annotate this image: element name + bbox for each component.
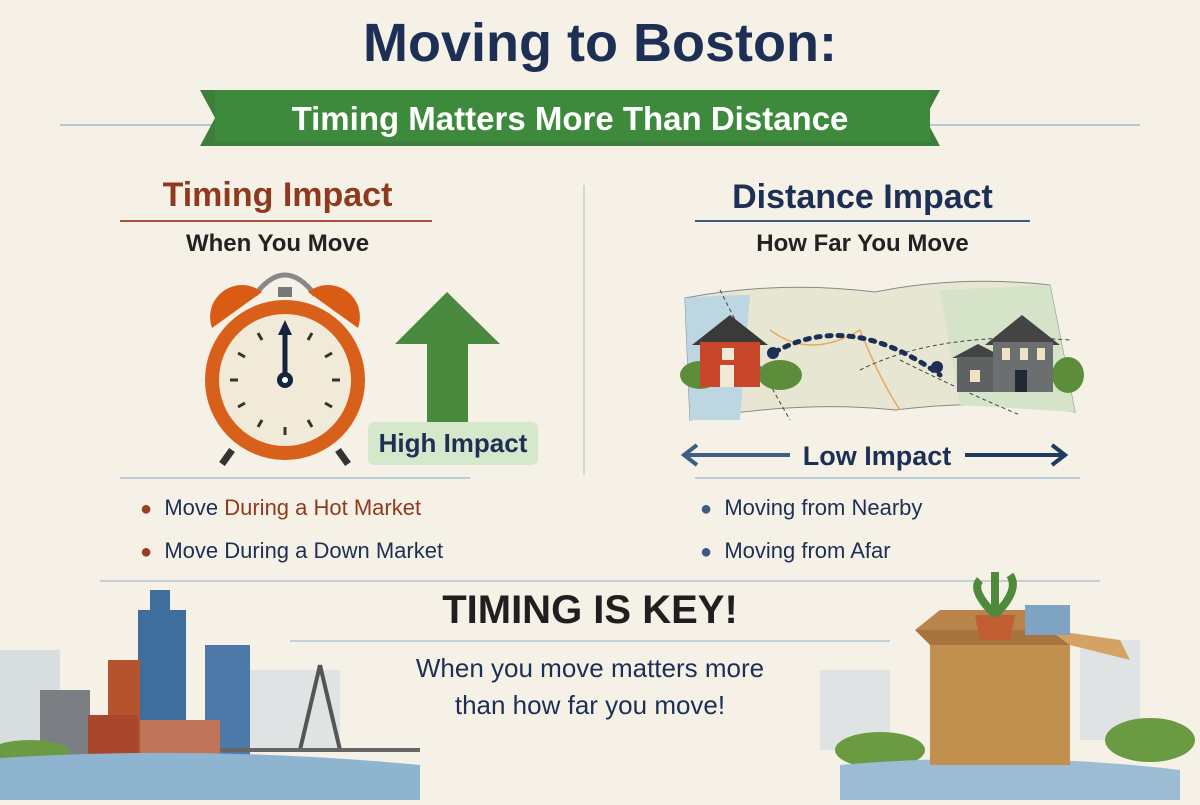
conclusion text: than how far you move!: [455, 690, 725, 720]
label: high impact: [368, 422, 538, 465]
icon: alarm clock: [205, 272, 365, 466]
left heading: Timing Impact: [163, 176, 392, 214]
map with houses: [680, 280, 1084, 421]
label: high impact: High Impact: [379, 428, 527, 458]
left subheading: When You Move: [186, 230, 369, 257]
left bullets: ● Move During a Down Market: [140, 538, 443, 563]
right subheading: How Far You Move: [756, 230, 969, 257]
arrow: high impact up: [395, 292, 500, 422]
conclusion text: When you move matters more: [416, 653, 764, 683]
illustration: boston skyline: [0, 590, 420, 800]
right bullets: ● Moving from Afar: [700, 538, 891, 563]
low impact with arrows: Low Impact: [803, 441, 951, 471]
right heading: Distance Impact: [732, 178, 993, 216]
conclusion heading: TIMING IS KEY!: [442, 588, 738, 632]
illustration: moving box with plant: [820, 572, 1195, 800]
title: Moving to Boston:: [363, 13, 837, 73]
right bullets: ● Moving from Nearby: [700, 495, 922, 520]
subtitle banner: Timing Matters More Than Distance: [292, 100, 848, 137]
right bullets: [700, 495, 922, 563]
left bullets: ● Move During a Hot Market: [140, 495, 421, 520]
low impact with arrows: [680, 441, 1068, 471]
conclusion text: [416, 653, 764, 720]
divider: [583, 185, 585, 475]
subtitle banner: [60, 90, 1140, 146]
left bullets: [140, 495, 443, 563]
